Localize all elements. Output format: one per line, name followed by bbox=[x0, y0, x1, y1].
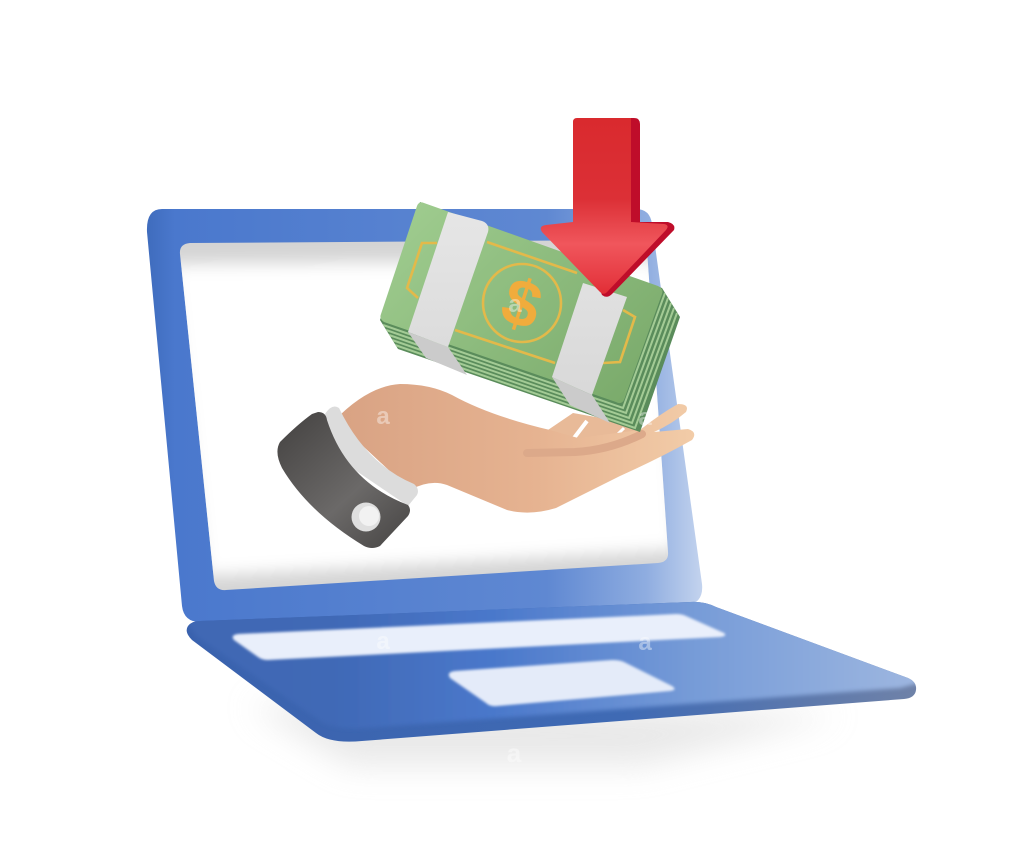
watermark letters: a bbox=[376, 403, 390, 430]
hand and palm bbox=[335, 384, 694, 513]
watermark letters: a bbox=[508, 291, 522, 318]
palm crease bbox=[527, 434, 642, 453]
laptop lid bbox=[147, 209, 702, 622]
bill ornaments bbox=[407, 242, 635, 363]
watermark letters: a bbox=[638, 404, 652, 431]
bills side bbox=[380, 202, 680, 432]
dollar sign: $ bbox=[493, 262, 551, 344]
shadow under laptop bbox=[250, 705, 840, 765]
keyboard bbox=[233, 614, 725, 660]
money stack bbox=[380, 202, 680, 432]
laptop base bbox=[180, 595, 930, 742]
laptop screen bbox=[170, 240, 678, 590]
watermark letters: a bbox=[638, 629, 652, 656]
watermark letters: a bbox=[376, 628, 390, 655]
jacket cuff bbox=[277, 412, 410, 548]
paper band left bbox=[408, 212, 488, 375]
watermark letters: a bbox=[507, 738, 522, 768]
touchpad bbox=[449, 660, 675, 706]
bill top face bbox=[380, 202, 662, 403]
shirt sleeve bbox=[325, 406, 418, 506]
hand back fingers bbox=[545, 413, 640, 452]
illustration: hand receiving money from laptop bbox=[146, 118, 916, 772]
red down arrow bbox=[541, 118, 674, 297]
paper band right bbox=[552, 283, 627, 423]
watermark letters bbox=[376, 291, 652, 768]
hand with shirt cuff bbox=[277, 384, 694, 548]
cuff button bbox=[352, 502, 380, 532]
